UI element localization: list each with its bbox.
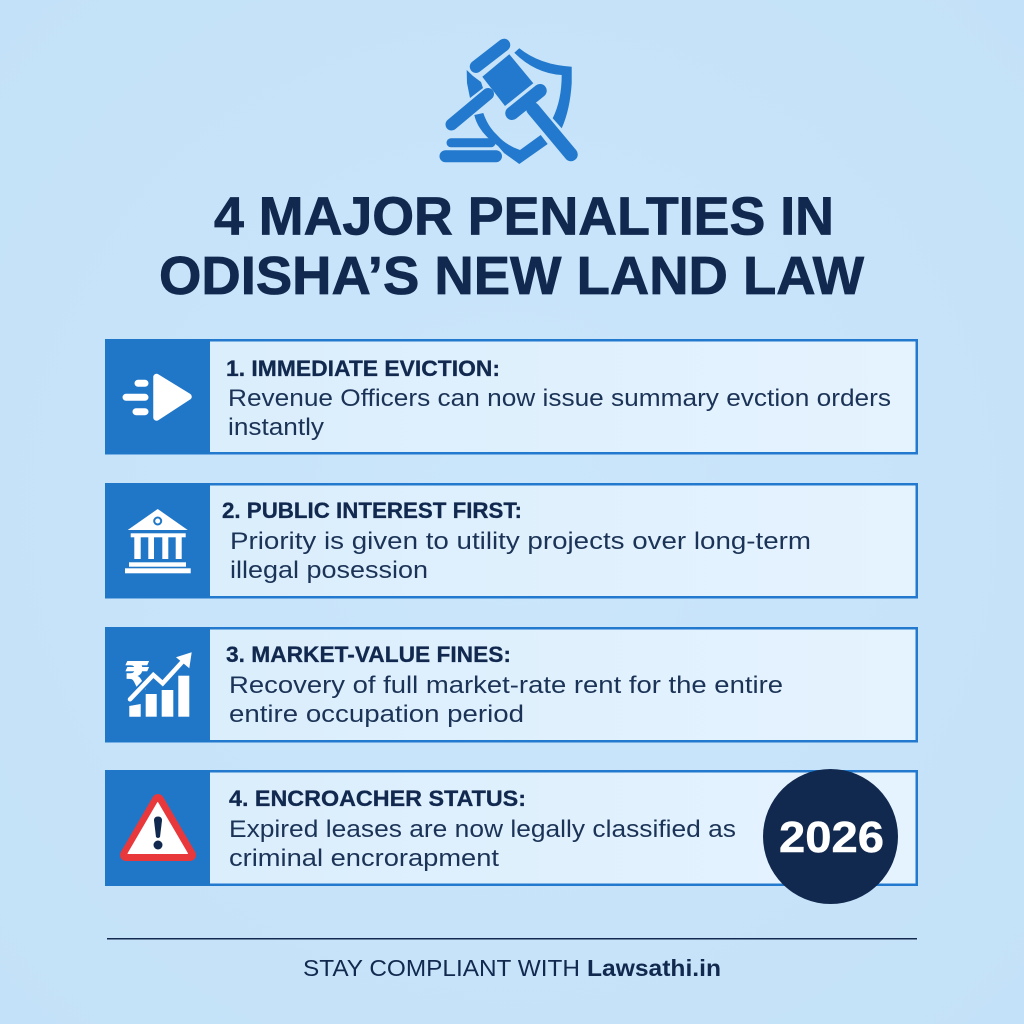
panel: public interest first: illegal posession (230, 557, 428, 584)
badge: 2026 (763, 769, 898, 904)
panel: market-value fines: entire occupation period (229, 701, 524, 728)
title: 4 MAJOR PENALTIES IN (214, 186, 834, 246)
panel: immediate eviction: 1. IMMEDIATE EVICTION: (226, 356, 500, 381)
panel: public interest first: 2. PUBLIC INTEREST FIRST: (222, 498, 522, 523)
icon: fast-forward arrow (126, 377, 188, 418)
title: ODISHA’S NEW LAND LAW (159, 246, 864, 306)
panel: encroacher status (105, 770, 917, 886)
title (159, 186, 864, 306)
panel: immediate eviction: Revenue Officers can now issue summary evction orders (228, 385, 891, 412)
footer text: STAY COMPLIANT WITH (303, 955, 580, 981)
footer text: Lawsathi.in (587, 955, 721, 981)
panel: encroacher status: 4. ENCROACHER STATUS: (229, 786, 526, 811)
badge: 2026: 2026 (779, 813, 884, 862)
panel: market-value fines: Recovery of full market-rate rent for the entire (229, 672, 783, 699)
panel: encroacher status: Expired leases are now legally classified as (229, 816, 736, 843)
icon: rupee growth chart (124, 652, 192, 717)
icon: gavel and shield (446, 45, 572, 164)
panel: immediate eviction (105, 339, 917, 454)
footer text (303, 955, 721, 981)
icon: government building (125, 509, 191, 573)
panel: encroacher status: criminal encrorapment (229, 845, 499, 872)
panel: market-value fines: 3. MARKET-VALUE FINES: (226, 642, 511, 667)
panel: public interest first (105, 483, 917, 598)
panel: market-value fines (105, 627, 917, 742)
panel: public interest first: Priority is given to utility projects over long-term (230, 528, 811, 555)
panel: immediate eviction: instantly (228, 414, 324, 441)
icon: rupee growth chart: ₹ (124, 654, 150, 698)
icon: warning triangle (126, 800, 190, 855)
